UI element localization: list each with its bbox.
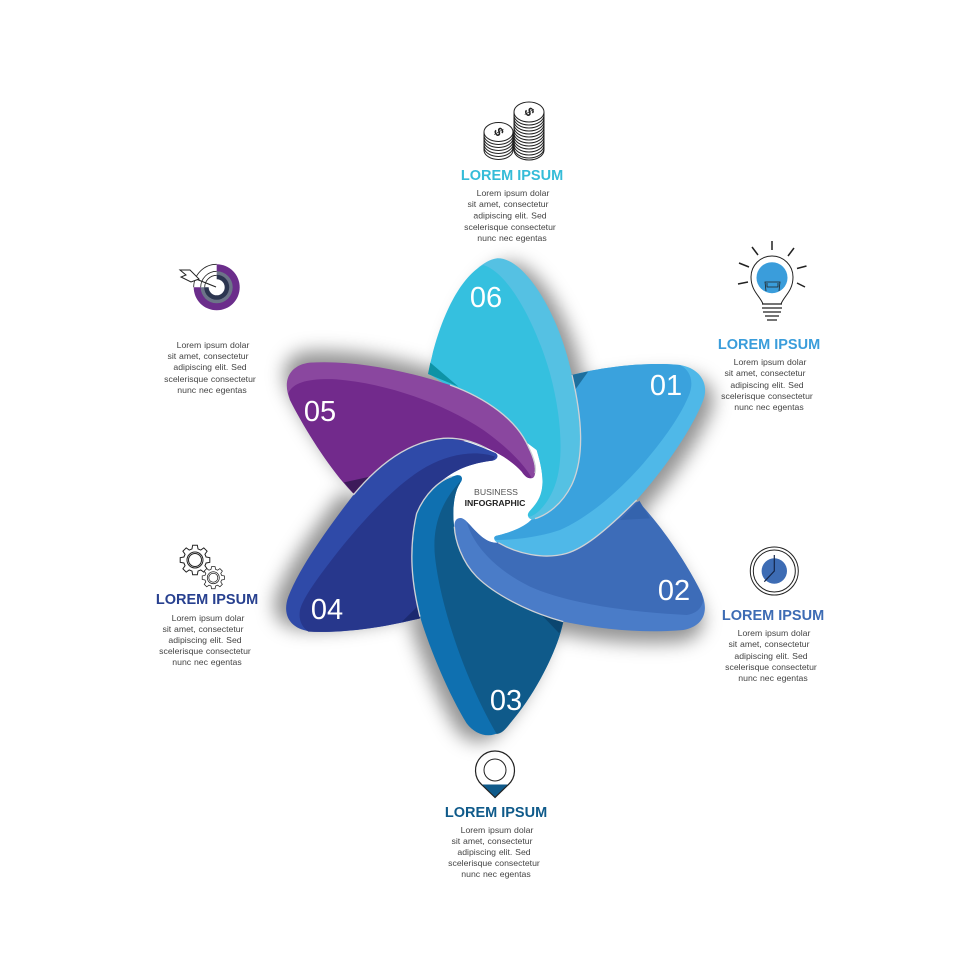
icon: map pin: [476, 751, 514, 798]
text block: Lorem ipsum dolar: [477, 188, 549, 198]
petal 01: [494, 364, 705, 556]
icon: clock: [750, 547, 798, 595]
number 04: 04: [311, 594, 343, 626]
text block: scelerisque consectetur: [164, 374, 256, 384]
icon: coin stacks: $: [491, 125, 508, 139]
petal 03: [412, 475, 563, 735]
text block: [725, 628, 817, 683]
text block: adipiscing elit. Sed: [730, 380, 804, 390]
text block: nunc nec egentas: [738, 673, 808, 683]
text block: scelerisque consectetur: [725, 662, 817, 672]
panel: 03 location: [445, 751, 547, 879]
petal 04: [286, 438, 498, 632]
text block: Lorem ipsum dolar: [738, 628, 810, 638]
text block: nunc nec egentas: [734, 402, 804, 412]
icon: target with arrow: [180, 263, 240, 310]
text block: nunc nec egentas: [177, 385, 247, 395]
text block: nunc nec egentas: [477, 233, 547, 243]
text block: sit amet, consectetur: [163, 624, 244, 634]
petal 02: [454, 501, 705, 631]
heading: LOREM IPSUM: [461, 168, 563, 184]
center title: [465, 487, 526, 508]
heading: LOREM IPSUM: [718, 337, 820, 353]
text block: Lorem ipsum dolar: [461, 825, 533, 835]
text block: adipiscing elit. Sed: [173, 362, 247, 372]
text block: scelerisque consectetur: [721, 391, 813, 401]
text block: sit amet, consectetur: [452, 836, 533, 846]
text block: [159, 613, 251, 667]
text block: [448, 825, 540, 879]
text block: adipiscing elit. Sed: [473, 210, 547, 220]
number 02: 02: [658, 575, 690, 607]
panel: 01 bulb: [718, 241, 820, 412]
text block: sit amet, consectetur: [468, 199, 549, 209]
icon: coin stacks: [484, 102, 544, 160]
flower diagram: [274, 258, 713, 742]
text block: sit amet, consectetur: [725, 368, 806, 378]
text block: [721, 357, 813, 412]
panel: 06 coins: [461, 102, 563, 243]
text block: Lorem ipsum dolar: [172, 613, 244, 623]
number 05: 05: [304, 396, 336, 428]
panel: 05 target: [164, 263, 256, 395]
number 03: 03: [490, 685, 522, 717]
panel: 04 gears: [156, 545, 258, 667]
petal 06: [428, 258, 580, 519]
icon: gears: [180, 545, 224, 589]
text block: sit amet, consectetur: [168, 351, 249, 361]
text block: [164, 340, 256, 395]
heading: LOREM IPSUM: [722, 608, 824, 624]
text block: adipiscing elit. Sed: [168, 635, 242, 645]
text block: scelerisque consectetur: [464, 222, 556, 232]
icon: light bulb: [738, 241, 806, 320]
number 06: 06: [470, 282, 502, 314]
icon: coin stacks: $: [521, 105, 538, 119]
number 01: 01: [650, 370, 682, 402]
center title: INFOGRAPHIC: [465, 498, 526, 508]
text block: Lorem ipsum dolar: [177, 340, 249, 350]
heading: LOREM IPSUM: [445, 805, 547, 821]
panel: 02 clock: [722, 547, 824, 683]
text block: scelerisque consectetur: [448, 858, 540, 868]
text block: sit amet, consectetur: [729, 639, 810, 649]
heading: LOREM IPSUM: [156, 592, 258, 608]
text block: scelerisque consectetur: [159, 646, 251, 656]
petal 05: [287, 362, 535, 493]
text block: Lorem ipsum dolar: [734, 357, 806, 367]
center title: BUSINESS: [474, 487, 518, 497]
text block: [464, 188, 556, 243]
text block: adipiscing elit. Sed: [734, 651, 808, 661]
text block: nunc nec egentas: [461, 869, 531, 879]
text block: nunc nec egentas: [172, 657, 242, 667]
text block: adipiscing elit. Sed: [457, 847, 531, 857]
